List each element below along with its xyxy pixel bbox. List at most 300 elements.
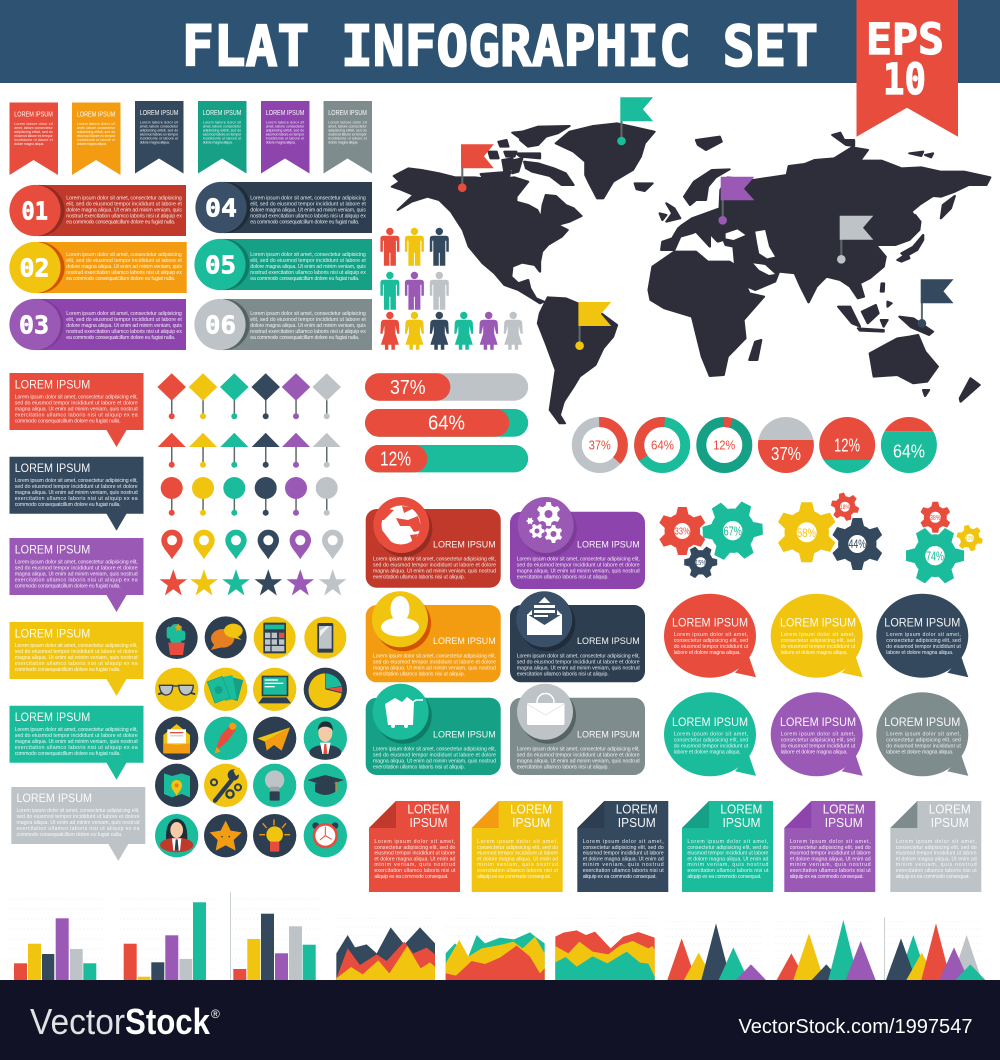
bar 05 <box>194 239 372 290</box>
flag navy <box>918 279 954 328</box>
document silver: consectetur adipisicing elit, sed do <box>896 845 977 851</box>
banner gray: dolore magna aliqua. <box>328 140 358 144</box>
callout purple: exercitation ullamco laboris nisi ut aliquip ex ea <box>15 578 138 584</box>
bubble gray: labore et dolore magna aliqua. <box>886 749 953 755</box>
document red <box>369 801 460 892</box>
callout silver: magna aliqua. Ut enim ad minim veniam, quis nostrud <box>16 820 140 826</box>
document navy: aliquip ex ea commodo consequat. <box>583 874 657 880</box>
banner navy: amet, labore consectetur <box>140 124 179 128</box>
callout purple: LOREM IPSUM <box>15 542 90 556</box>
card shopping cart: magna aliqua. Ut enim ad minim veniam, quis nostrud <box>373 758 496 764</box>
bar chart 1 <box>10 899 104 980</box>
card person: magna aliqua. Ut enim ad minim veniam, quis nostrud <box>373 666 496 672</box>
area chart 2 <box>446 918 545 980</box>
bubble navy: labore et dolore magna aliqua. <box>886 650 953 656</box>
icon: lit bulb <box>253 814 296 857</box>
banner navy: adipisicing elitsit, sed do <box>140 128 178 132</box>
gear 18%: 18% <box>840 505 851 511</box>
donut and pie charts <box>572 417 937 473</box>
icon: pencil <box>204 717 247 760</box>
banner gray: LOREM IPSUM <box>328 110 367 117</box>
banner orange: adipisicing elitsit, sed do <box>77 130 115 134</box>
progress 37%: 37% <box>390 377 426 399</box>
banner orange: Lorem labore dolor sit <box>77 122 115 126</box>
banner purple: amet, labore consectetur <box>266 124 305 128</box>
bubble purple: Lorem ipsum dolor sit amet, <box>781 731 855 737</box>
gear 58%: 58% <box>797 526 816 540</box>
card gears: LOREM IPSUM <box>577 539 640 550</box>
document red: et dolore magna aliqua. Ut enim ad <box>374 856 456 862</box>
card globe: sed do eiusmod tempor incididunt ut labore et dolore <box>373 562 496 568</box>
bar 01: elit, sed do eiusmod tempor incididunt ut labore et <box>66 202 182 208</box>
callout teal: magna aliqua. Ut enim ad minim veniam, quis nostrud <box>15 739 138 745</box>
bubble gray: Lorem ipsum dolor sit amet, <box>886 731 961 737</box>
people icons <box>380 228 523 350</box>
bubble navy: consectetur adipisicing elit, sed <box>886 638 961 644</box>
card shopping cart: Lorem ipsum dolor sit amet, consectetur adipisicing elit, <box>373 746 496 752</box>
document red: IPSUM <box>410 815 448 830</box>
document yellow <box>472 801 563 892</box>
triangle pins <box>158 433 341 468</box>
card gears: exercitation ullamco laboris nisi ut aliquip. <box>517 574 609 580</box>
document teal: et dolore magna aliqua. Ut enim ad <box>687 856 769 862</box>
callout silver: commodo consequatcillum dolore eu fugiat nulla. <box>16 832 122 838</box>
document teal: exercitation ullamco laboris nisi ut <box>687 868 769 874</box>
banner teal: eiusmod labore ex tempor <box>203 132 242 136</box>
icon: businessman <box>304 717 347 760</box>
banner purple <box>261 101 310 174</box>
document navy: exercitation ullamco laboris nisi ut <box>583 868 664 874</box>
bar 03: dolore magna aliqua. Ut enim ad minim veniam, quis <box>66 323 182 329</box>
bubble purple: LOREM IPSUM <box>780 715 856 729</box>
card globe: LOREM IPSUM <box>433 539 496 550</box>
callout yellow: LOREM IPSUM <box>15 626 90 640</box>
callout red: exercitation ullamco laboris nisi ut aliquip ex ea <box>15 412 138 418</box>
icon: paper plane <box>253 717 296 760</box>
donut 64% <box>630 413 694 477</box>
gear 38%: 38% <box>930 515 940 522</box>
bar 04 <box>195 182 372 233</box>
banner orange <box>72 102 120 175</box>
banner gray: adipisicing elitsit, sed do <box>328 128 367 132</box>
document yellow: aliquip ex ea commodo consequat. <box>477 874 551 880</box>
bar 06: ea commodo consequatcillum dolore eu fugiat nulla. <box>250 335 359 341</box>
bubble red: labore et dolore magna aliqua. <box>674 650 741 656</box>
banner red <box>10 102 58 175</box>
card gears: magna aliqua. Ut enim ad minim veniam, quis nostrud <box>517 568 640 574</box>
document purple: minim veniam, quis nostrud <box>790 862 871 868</box>
callout silver: exercitation ullamco laboris nisi ut aliquip ex ea <box>16 826 140 832</box>
donut 37%: 37% <box>589 438 611 452</box>
flag yellow <box>575 302 611 350</box>
panel: icon cards <box>366 497 645 775</box>
icon: businesswoman <box>155 814 198 857</box>
footer image id: VectorStock.com/1997547 <box>738 1016 972 1038</box>
banner purple: dolore magna aliqua. <box>266 140 296 144</box>
map markers <box>161 530 343 559</box>
card person: sed do eiusmod tempor incididunt ut labore et dolore <box>373 660 496 666</box>
banner red: Lorem labore dolor sit <box>14 122 53 126</box>
bar 03: Lorem ipsum dolor sit amet, consectetur adipisicing <box>66 311 182 317</box>
bubble yellow: LOREM IPSUM <box>780 616 856 630</box>
icon: smiling star <box>204 814 247 857</box>
flag purple <box>718 177 754 225</box>
bubble navy: LOREM IPSUM <box>884 616 960 630</box>
icon: banknotes <box>204 668 247 711</box>
card person: Lorem ipsum dolor sit amet, consectetur adipisicing elit, <box>373 654 496 660</box>
document silver: LOREM <box>929 802 971 817</box>
gear 74%: 74% <box>926 548 944 563</box>
bar 06: elit, sed do eiusmod tempor incididunt ut labore et <box>250 317 366 323</box>
callout teal: exercitation ullamco laboris nisi ut aliquip ex ea <box>15 745 138 751</box>
footer logo: Vector <box>30 1001 125 1042</box>
bar 05: nostrud exercitation ullamco laboris nisi ut aliquip ex <box>250 270 366 276</box>
card briefcase: magna aliqua. Ut enim ad minim veniam, quis nostrud <box>517 758 640 764</box>
banner teal: LOREM IPSUM <box>203 110 242 117</box>
progress bars <box>365 373 528 472</box>
card gears: Lorem ipsum dolor sit amet, consectetur adipisicing elit, <box>517 556 640 562</box>
bar 01: nostrud exercitation ullamco laboris nisi ut aliquip ex <box>66 214 182 220</box>
document red: LOREM <box>407 802 449 817</box>
banner purple: incididunte ut labore et <box>266 136 304 140</box>
document navy: minim veniam, quis nostrud <box>583 862 664 868</box>
card mail: sed do eiusmod tempor incididunt ut labore et dolore <box>517 660 640 666</box>
document purple: IPSUM <box>825 815 863 830</box>
header bar <box>0 0 1000 83</box>
banner gray: eiusmod labore ex tempor <box>328 132 367 136</box>
panel: pins and stars <box>157 373 347 596</box>
callout purple: Lorem ipsum dolor sit amet, consectetur adipisicing elit, <box>15 560 138 566</box>
triangle chart 2 <box>775 920 876 980</box>
card gears <box>510 497 645 589</box>
bubble teal: labore et dolore magna aliqua. <box>674 749 741 755</box>
banner orange: LOREM IPSUM <box>77 112 116 118</box>
bubble yellow: do eiusmod tempor incididunt ut <box>781 644 856 650</box>
card person: LOREM IPSUM <box>433 636 496 647</box>
bubble red: LOREM IPSUM <box>672 616 748 630</box>
bar 03: ea commodo consequatcillum dolore eu fugiat nulla. <box>66 335 175 341</box>
donut 12% <box>701 422 747 468</box>
card globe <box>366 497 501 588</box>
banner navy: incididunte ut labore et <box>140 136 178 140</box>
banner orange: amet, labore consectetur <box>77 126 116 130</box>
document silver: exercitation ullamco laboris nisi ut <box>896 868 977 874</box>
panel: bookmark banners <box>10 101 372 175</box>
callout navy: Lorem ipsum dolor sit amet, consectetur adipisicing elit, <box>15 478 138 484</box>
document silver: Lorem ipsum dolor sit amet, <box>896 839 977 845</box>
donut 64%: 64% <box>651 438 674 452</box>
callout red: commodo consequatcillum dolore eu fugiat nulla. <box>15 418 121 424</box>
bubble teal: do eiusmod tempor incididunt ut <box>674 743 749 749</box>
callout teal: LOREM IPSUM <box>15 710 90 724</box>
bar 03: nostrud exercitation ullamco laboris nisi ut aliquip ex <box>66 329 182 335</box>
bar 02: elit, sed do eiusmod tempor incididunt ut labore et <box>66 258 182 264</box>
document teal <box>682 801 773 892</box>
callout teal: commodo consequatcillum dolore eu fugiat nulla. <box>15 751 121 757</box>
bar 04: nostrud exercitation ullamco laboris nisi ut aliquip ex <box>250 214 366 220</box>
callout red: LOREM IPSUM <box>15 377 90 391</box>
card mail: exercitation ullamco laboris nisi ut aliquip. <box>517 672 609 678</box>
bubble gray: do eiusmod tempor incididunt ut <box>886 743 961 749</box>
callout navy: sed do eiusmod tempor incididunt ut labore et dolore <box>15 484 138 490</box>
bar chart 2 <box>120 899 215 980</box>
banner purple: eiusmod labore ex tempor <box>266 132 305 136</box>
banner teal: incididunte ut labore et <box>203 136 241 140</box>
bubble navy: do eiusmod tempor incididunt ut <box>886 644 961 650</box>
card globe: Lorem ipsum dolor sit amet, consectetur adipisicing elit, <box>373 556 496 562</box>
banner navy: eiusmod labore ex tempor <box>140 132 179 136</box>
banner navy <box>135 101 184 174</box>
banner red: LOREM IPSUM <box>14 112 53 118</box>
bubble purple: do eiusmod tempor incididunt ut <box>781 743 856 749</box>
callout yellow: commodo consequatcillum dolore eu fugiat nulla. <box>15 667 121 673</box>
flag silver <box>837 216 873 264</box>
ribbon: EPS 10 <box>856 0 958 137</box>
bar 02: Lorem ipsum dolor sit amet, consectetur adipisicing <box>66 252 182 258</box>
card globe: exercitation ullamco laboris nisi ut aliquip. <box>373 574 465 580</box>
bubble teal: Lorem ipsum dolor sit amet, <box>674 731 748 737</box>
bubble red <box>664 594 756 678</box>
panel: callouts <box>10 373 145 861</box>
document purple: eiusmod tempor incididunt ut labore <box>790 851 871 857</box>
callout purple <box>10 538 144 612</box>
callout purple: sed do eiusmod tempor incididunt ut labore et dolore <box>15 566 138 572</box>
banner red: incididunte ut labore et <box>14 138 53 142</box>
flag red <box>458 144 494 192</box>
pie 12% <box>819 416 877 474</box>
callout purple: magna aliqua. Ut enim ad minim veniam, quis nostrud <box>15 572 138 578</box>
bar 04: dolore magna aliqua. Ut enim ad minim veniam, quis <box>250 208 366 214</box>
bar 06 <box>194 299 372 350</box>
banner teal <box>198 101 246 174</box>
bubble purple: labore et dolore magna aliqua. <box>781 749 848 755</box>
panel: icon grid <box>155 616 347 857</box>
document purple: et dolore magna aliqua. Ut enim ad <box>790 856 871 862</box>
gear 38% <box>914 496 957 539</box>
bubble teal <box>664 692 756 776</box>
banner navy: LOREM IPSUM <box>140 110 179 117</box>
banner teal: Lorem labore dolor sit <box>203 120 241 124</box>
document red: exercitation ullamco laboris nisi ut <box>374 868 456 874</box>
callout teal: Lorem ipsum dolor sit amet, consectetur adipisicing elit, <box>15 727 138 733</box>
banner purple: LOREM IPSUM <box>266 110 305 117</box>
gear 15% <box>684 546 717 579</box>
bar 04: ea commodo consequatcillum dolore eu fugiat nulla. <box>250 220 359 226</box>
stars <box>160 569 347 596</box>
banner navy: Lorem labore dolor sit <box>140 120 178 124</box>
document silver: IPSUM <box>931 815 969 830</box>
panel: percentage gears <box>649 489 986 585</box>
area chart 1 <box>336 918 435 980</box>
banner purple: Lorem labore dolor sit <box>266 120 304 124</box>
bar 02: 02 <box>20 254 50 282</box>
banner orange: incididunte ut labore et <box>77 138 115 142</box>
document purple: LOREM <box>823 802 865 817</box>
bar 05: ea commodo consequatcillum dolore eu fugiat nulla. <box>250 276 359 282</box>
callout teal <box>10 706 144 780</box>
icon: alarm clock <box>304 814 347 857</box>
bar 03 <box>9 299 186 350</box>
banner teal: dolore magna aliqua. <box>203 140 233 144</box>
icon: pie chart <box>304 668 347 711</box>
banner red: dolore magna aliqua. <box>14 142 44 146</box>
callout purple: commodo consequatcillum dolore eu fugiat nulla. <box>15 584 121 590</box>
callout silver: Lorem ipsum dolor sit amet, consectetur adipisicing elit, <box>16 808 140 814</box>
document yellow: consectetur adipisicing elit, sed do <box>477 845 558 851</box>
banner navy: dolore magna aliqua. <box>140 140 170 144</box>
bubble yellow <box>771 594 863 678</box>
bar 05: 05 <box>205 250 236 280</box>
document teal: eiusmod tempor incididunt ut labore <box>687 851 769 857</box>
bar 04: 04 <box>205 194 237 222</box>
document yellow: et dolore magna aliqua. Ut enim ad <box>477 856 558 862</box>
progress 12%: 12% <box>380 448 411 470</box>
gear 18% <box>828 489 862 524</box>
document purple: aliquip ex ea commodo consequat. <box>790 874 864 880</box>
bar 01: dolore magna aliqua. Ut enim ad minim veniam, quis <box>66 208 182 214</box>
progress 12% <box>365 445 528 472</box>
bar 02: ea commodo consequatcillum dolore eu fugiat nulla. <box>66 276 175 282</box>
banner orange: eiusmod labore ex tempor <box>77 134 116 138</box>
banner purple: adipisicing elitsit, sed do <box>266 128 304 132</box>
triangle chart 3 <box>884 917 985 980</box>
pie 64% <box>880 416 938 474</box>
bubble red: do eiusmod tempor incididunt ut <box>674 644 749 650</box>
bar 06: nostrud exercitation ullamco laboris nisi ut aliquip ex <box>250 329 366 335</box>
callout silver: LOREM IPSUM <box>16 791 92 805</box>
bar 06: 06 <box>205 310 236 340</box>
banner teal: amet, labore consectetur <box>203 124 242 128</box>
banner gray: Lorem labore dolor sit <box>328 120 367 124</box>
bar 03: elit, sed do eiusmod tempor incididunt ut labore et <box>66 317 182 323</box>
document red: consectetur adipisicing elit, sed do <box>374 845 456 851</box>
bar 05: elit, sed do eiusmod tempor incididunt ut labore et <box>250 258 366 264</box>
document red: Lorem ipsum dolor sit amet, <box>374 839 455 845</box>
document silver: minim veniam, quis nostrud <box>896 862 977 868</box>
banner red: eiusmod labore ex tempor <box>14 134 53 138</box>
callout navy: commodo consequatcillum dolore eu fugiat nulla. <box>15 502 121 508</box>
document navy: Lorem ipsum dolor sit amet, <box>583 839 664 845</box>
card briefcase: sed do eiusmod tempor incididunt ut labore et dolore <box>517 752 640 758</box>
callout yellow: magna aliqua. Ut enim ad minim veniam, quis nostrud <box>15 655 138 661</box>
callout yellow: Lorem ipsum dolor sit amet, consectetur adipisicing elit, <box>15 643 138 649</box>
card mail: LOREM IPSUM <box>577 636 640 647</box>
icon: cactus <box>156 617 198 659</box>
document red: minim veniam, quis nostrud <box>374 862 456 868</box>
callout silver: sed do eiusmod tempor incididunt ut labore et dolore <box>16 814 140 820</box>
document yellow: eiusmod tempor incididunt ut labore <box>477 851 558 857</box>
callout red: sed do eiusmod tempor incididunt ut labore et dolore <box>15 400 138 406</box>
callout red <box>10 373 144 447</box>
document navy: LOREM <box>616 802 658 817</box>
banner red: adipisicing elitsit, sed do <box>14 130 53 134</box>
bar 02 <box>9 242 187 293</box>
document yellow: IPSUM <box>512 815 550 830</box>
banner orange: dolore magna aliqua. <box>77 142 107 146</box>
icon: calculator <box>254 617 296 659</box>
bar 01: ea commodo consequatcillum dolore eu fugiat nulla. <box>66 220 175 226</box>
card shopping cart: exercitation ullamco laboris nisi ut aliquip. <box>373 764 465 770</box>
callout yellow: sed do eiusmod tempor incididunt ut labore et dolore <box>15 649 138 655</box>
card briefcase: exercitation ullamco laboris nisi ut aliquip. <box>517 764 609 770</box>
ribbon: EPS 10: 10 <box>883 55 926 105</box>
panel: speech bubbles <box>664 594 968 776</box>
document teal: minim veniam, quis nostrud <box>687 862 769 868</box>
footer logo: Stock <box>125 1001 211 1042</box>
card gears: sed do eiusmod tempor incididunt ut labore et dolore <box>517 562 640 568</box>
bar 04: Lorem ipsum dolor sit amet, consectetur adipisicing <box>250 196 366 202</box>
document teal: Lorem ipsum dolor sit amet, <box>687 839 768 845</box>
pie 37% <box>757 416 815 474</box>
callout navy: magna aliqua. Ut enim ad minim veniam, quis nostrud <box>15 490 138 496</box>
gear 67% <box>701 499 764 562</box>
panel: folded documents <box>369 801 981 892</box>
document teal: consectetur adipisicing elit, sed do <box>687 845 769 851</box>
document navy: et dolore magna aliqua. Ut enim ad <box>583 856 664 862</box>
callout navy: LOREM IPSUM <box>15 461 90 475</box>
document purple: exercitation ullamco laboris nisi ut <box>790 868 871 874</box>
card globe: magna aliqua. Ut enim ad minim veniam, quis nostrud <box>373 568 496 574</box>
bar 05: dolore magna aliqua. Ut enim ad minim veniam, quis <box>250 264 366 270</box>
banner gray: incididunte ut labore et <box>328 136 367 140</box>
bubble navy <box>876 594 968 678</box>
gear 33%: 33% <box>674 526 690 538</box>
document navy: IPSUM <box>618 815 656 830</box>
donut 37% <box>577 422 623 468</box>
diamond pins <box>157 373 341 419</box>
donut 12%: 12% <box>713 438 735 452</box>
bubble red: consectetur adipisicing elit, sed <box>674 638 748 644</box>
gear 44%: 44% <box>848 539 866 551</box>
callout navy <box>10 457 144 531</box>
document purple: Lorem ipsum dolor sit amet, <box>790 839 871 845</box>
callout red: Lorem ipsum dolor sit amet, consectetur adipisicing elit, <box>15 394 138 400</box>
bubble gray: LOREM IPSUM <box>884 715 960 729</box>
bubble gray: consectetur adipisicing elit, sed <box>886 737 961 743</box>
bar 02: nostrud exercitation ullamco laboris nisi ut aliquip ex <box>66 270 182 276</box>
icon: wrench and nuts <box>204 764 247 807</box>
bar 05: Lorem ipsum dolor sit amet, consectetur adipisicing <box>250 252 366 258</box>
icon: light bulb grey <box>253 764 296 807</box>
bubble yellow: labore et dolore magna aliqua. <box>781 650 848 656</box>
callout silver <box>11 787 145 861</box>
document teal: IPSUM <box>722 815 760 830</box>
document yellow: exercitation ullamco laboris nisi ut <box>477 868 559 874</box>
card briefcase <box>510 684 645 775</box>
triangle chart 1 <box>665 922 766 980</box>
bubble yellow: consectetur adipisicing elit, sed <box>781 638 855 644</box>
progress 64%: 64% <box>428 412 465 434</box>
document yellow: Lorem ipsum dolor sit amet, <box>477 839 558 845</box>
document purple: consectetur adipisicing elit, sed do <box>790 845 871 851</box>
callout navy: exercitation ullamco laboris nisi ut aliquip ex ea <box>15 496 138 502</box>
icon: chat bubbles <box>205 616 247 658</box>
document navy: eiusmod tempor incididunt ut labore <box>583 851 664 857</box>
bar 06: Lorem ipsum dolor sit amet, consectetur adipisicing <box>250 311 366 317</box>
bar 01 <box>9 185 186 236</box>
card briefcase: LOREM IPSUM <box>577 729 640 740</box>
document yellow: LOREM <box>510 802 552 817</box>
bubble gray <box>876 692 968 776</box>
icon: envelope with letter <box>155 717 198 760</box>
card mail: magna aliqua. Ut enim ad minim veniam, quis nostrud <box>517 666 640 672</box>
world map <box>392 123 990 423</box>
icon: folded map <box>155 764 198 807</box>
progress 64% <box>365 409 528 437</box>
pie 12%: 12% <box>834 436 860 456</box>
icon: laptop <box>253 668 296 711</box>
banner red: amet, labore consectetur <box>14 126 53 130</box>
